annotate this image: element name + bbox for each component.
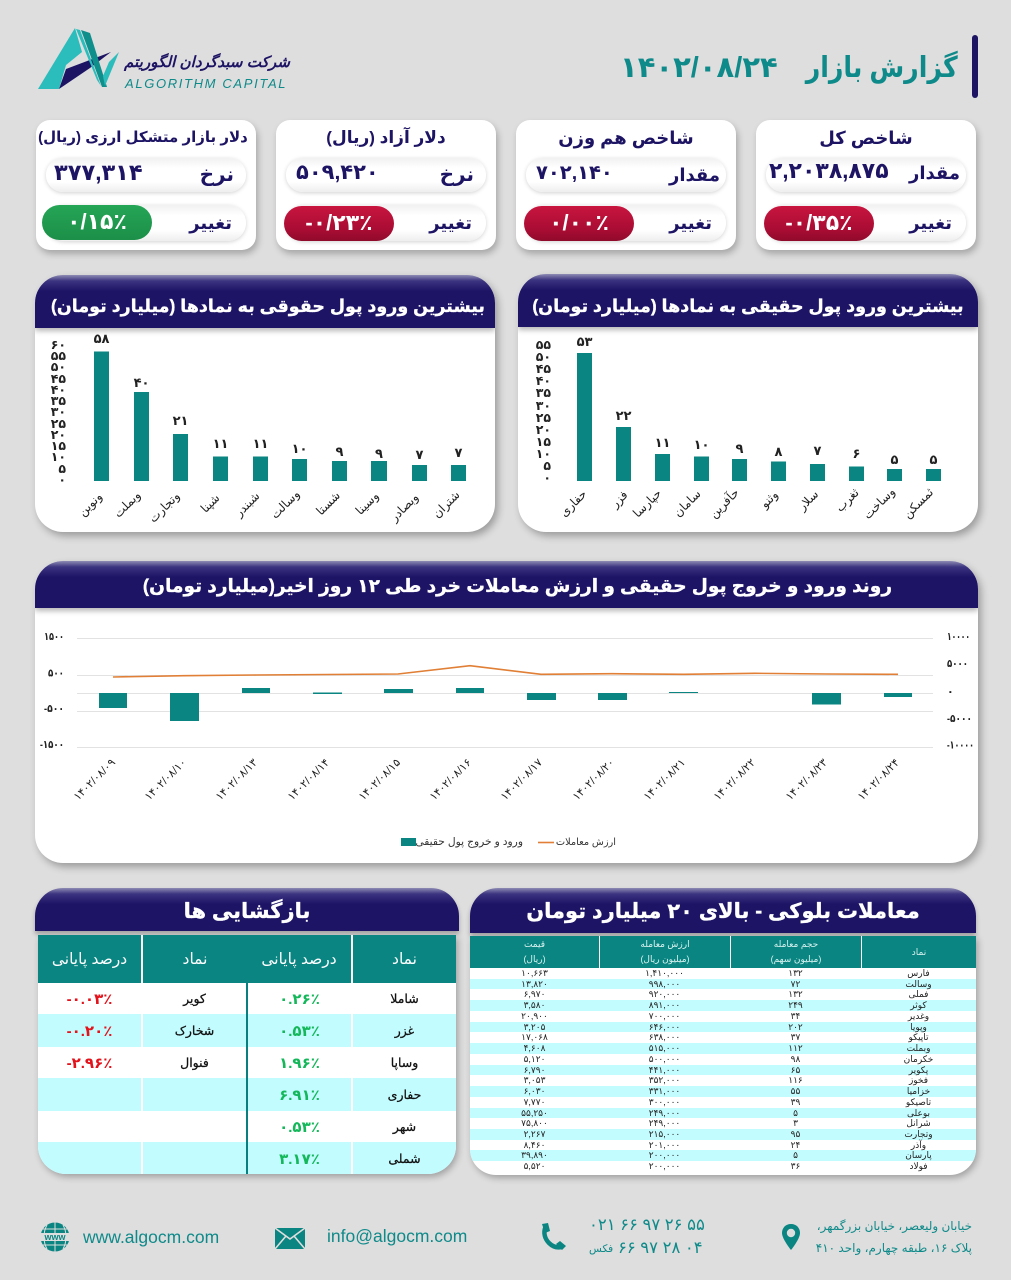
x axis labels: شپنا bbox=[198, 491, 223, 516]
bar values: ۴۰ bbox=[134, 375, 149, 390]
table: block trades: ۵ bbox=[793, 1150, 798, 1160]
bar values: ۱۱ bbox=[253, 436, 268, 451]
panel heading bbox=[35, 275, 495, 328]
table: block trades: کوثر bbox=[910, 1000, 927, 1010]
change value bbox=[284, 206, 394, 241]
bar values: ۱۰ bbox=[694, 437, 709, 452]
table header: (میلیون ریال) bbox=[640, 954, 690, 964]
table: block trades: ۳,۲۰۵ bbox=[524, 1022, 545, 1032]
table: block trades: ۳۵۲,۰۰۰ bbox=[649, 1075, 680, 1085]
value: ۷۰۲,۱۴۰ bbox=[536, 162, 613, 184]
panel: returns table bbox=[32, 888, 462, 1180]
bar values: ۷ bbox=[814, 443, 822, 458]
panel: block trades table bbox=[468, 888, 982, 1182]
x axis labels: وبصادر bbox=[386, 490, 422, 526]
bar values: ۵۸ bbox=[94, 331, 109, 346]
card title: شاخص کل bbox=[819, 128, 913, 148]
x axis labels: شبندر bbox=[231, 489, 263, 521]
table: block trades: ۷۲ bbox=[791, 979, 800, 989]
card: equal weight index bbox=[516, 120, 736, 250]
table: symbols and closing percent: -۰.۰۳٪ bbox=[67, 990, 112, 1008]
bar values: ۹ bbox=[736, 441, 744, 456]
table: block trades: ۲۰,۹۰۰ bbox=[521, 1011, 548, 1021]
table: block trades: ۳۴ bbox=[791, 1011, 800, 1021]
x axis labels: وسینا bbox=[353, 489, 382, 518]
table: block trades: پکویر bbox=[909, 1065, 928, 1075]
table: block trades: ۷۰۰,۰۰۰ bbox=[649, 1011, 680, 1021]
table: block trades: ۲,۲۶۷ bbox=[524, 1129, 545, 1139]
card title: دلار آزاد (ریال) bbox=[326, 128, 446, 147]
card title: دلار بازار متشکل ارزی (ریال) bbox=[38, 129, 248, 146]
x axis labels: ونوین bbox=[75, 489, 106, 520]
table: block trades: فخوز bbox=[909, 1075, 928, 1085]
y axis labels: ۰ bbox=[58, 473, 66, 487]
icon: logo mark bbox=[38, 28, 119, 89]
card: total index bbox=[756, 120, 976, 250]
x axis labels: وساخت bbox=[861, 485, 899, 523]
table: symbols and closing percent: شملی bbox=[388, 1152, 421, 1166]
panel: 12 day retail flow trend bbox=[35, 561, 978, 863]
y axis labels: ۴۰ bbox=[51, 383, 66, 397]
table: symbols and closing percent: ۱.۹۶٪ bbox=[279, 1054, 320, 1072]
table header: ارزش معامله bbox=[640, 939, 690, 949]
table header: (میلیون سهم) bbox=[771, 954, 821, 964]
label: change: تغییر bbox=[429, 213, 472, 233]
change pill bbox=[766, 205, 966, 241]
title: market report: گزارش بازار bbox=[806, 52, 958, 84]
change value: ۰/۱۵٪ bbox=[67, 209, 127, 234]
panel heading bbox=[470, 888, 976, 933]
email address: info@algocm.com bbox=[327, 1226, 467, 1246]
title: report date: ۱۴۰۲/۰۸/۲۴ bbox=[620, 52, 778, 84]
date axis labels: ۱۴۰۲/۰۸/۲۴ bbox=[856, 757, 902, 803]
legend bbox=[401, 836, 616, 848]
y axis labels: ۵۰ bbox=[536, 350, 551, 364]
table: block trades: ۲۰۲ bbox=[788, 1022, 803, 1032]
table: symbols and closing percent: درصد پایانی bbox=[52, 950, 127, 968]
bar values: ۱۰ bbox=[292, 441, 307, 456]
line: trade value bbox=[113, 666, 898, 677]
y axis labels: ۱۵ bbox=[51, 439, 66, 453]
table: symbols and closing percent: -۰.۲۰٪ bbox=[67, 1022, 112, 1040]
label: change: تغییر bbox=[669, 213, 712, 233]
panel heading: بیشترین ورود پول حقیقی به نمادها (میلیارد تومان) bbox=[532, 296, 964, 316]
table: block trades: ۴۴۱,۰۰۰ bbox=[649, 1065, 680, 1075]
table: block trades: ۱۳۲ bbox=[788, 989, 803, 999]
table: block trades: ۲۰۰,۰۰۰ bbox=[649, 1161, 680, 1171]
table: symbols and closing percent: کویر bbox=[183, 992, 206, 1006]
y axis labels: ۳۰ bbox=[536, 399, 551, 413]
table: block trades: بوعلی bbox=[907, 1108, 930, 1118]
change value: -۰/۲۳٪ bbox=[305, 210, 373, 235]
y axis labels: ۵۵ bbox=[51, 349, 66, 363]
table: block trades: ۶۴۶,۰۰۰ bbox=[649, 1022, 680, 1032]
table: block trades: ۳۶ bbox=[791, 1161, 800, 1171]
right axis labels: -۵۰۰۰ bbox=[947, 713, 972, 725]
table: block trades: ۳,۰۵۳ bbox=[524, 1075, 545, 1085]
address text: پلاک ۱۶، طبقه چهارم، واحد ۴۱۰ bbox=[816, 1241, 972, 1255]
table: block trades: ۳۹,۸۹۰ bbox=[521, 1150, 548, 1160]
table header bbox=[470, 936, 976, 968]
address text: خیابان ولیعصر، خیابان بزرگمهر، bbox=[817, 1219, 972, 1233]
y axis labels: ۵ bbox=[58, 462, 66, 476]
panel heading: بیشترین ورود پول حقوقی به نمادها (میلیارد تومان) bbox=[51, 296, 485, 316]
y axis labels: ۴۰ bbox=[536, 374, 551, 388]
table: block trades: ۱۱۶ bbox=[788, 1075, 803, 1085]
table: block trades: ۲۰۰,۰۰۰ bbox=[649, 1150, 680, 1160]
date axis labels: ۱۴۰۲/۰۸/۱۰ bbox=[143, 757, 189, 803]
table: block trades: ۹۸ bbox=[791, 1054, 800, 1064]
icon: envelope bbox=[275, 1228, 305, 1249]
bar values: ۵ bbox=[930, 452, 938, 467]
table: symbols and closing percent: نماد bbox=[183, 950, 207, 968]
date axis labels: ۱۴۰۲/۰۸/۱۵ bbox=[357, 757, 403, 803]
x axis labels: شتران bbox=[430, 488, 463, 521]
table: symbols and closing percent: حفاری bbox=[388, 1088, 421, 1102]
label: change: تغییر bbox=[189, 213, 232, 233]
x axis labels: سلار bbox=[794, 487, 822, 515]
y axis labels: ۱۰ bbox=[536, 447, 551, 461]
table: block trades: ۵,۱۲۰ bbox=[524, 1054, 545, 1064]
table header: قیمت bbox=[524, 939, 545, 949]
label: change: تغییر bbox=[909, 213, 952, 233]
label: amount: مقدار bbox=[669, 165, 720, 185]
table: symbols and closing percent: درصد پایانی bbox=[261, 950, 337, 968]
table: block trades: ۳۹ bbox=[791, 1097, 800, 1107]
table: block trades: ۹۲۰,۰۰۰ bbox=[649, 989, 680, 999]
table: block trades: خزامیا bbox=[907, 1086, 930, 1096]
website address: www.algocm.com bbox=[83, 1227, 219, 1247]
bar values bbox=[577, 334, 938, 467]
y axis labels: ۴۵ bbox=[51, 372, 66, 386]
bar values: ۲۲ bbox=[616, 408, 631, 423]
y axis labels: ۴۵ bbox=[536, 362, 551, 376]
y axis labels: ۳۵ bbox=[51, 394, 66, 408]
x axis labels: وسالت bbox=[268, 487, 303, 522]
table: symbols and closing percent: ۰.۵۳٪ bbox=[279, 1118, 320, 1136]
table: block trades: ۱۳,۸۲۰ bbox=[521, 979, 548, 989]
bar values: ۵ bbox=[891, 452, 899, 467]
table: block trades: تاپیکو bbox=[908, 1032, 929, 1042]
panel heading bbox=[518, 274, 978, 327]
x axis labels: وبملت bbox=[111, 488, 144, 521]
table: block trades: وآذر bbox=[911, 1140, 926, 1150]
table: symbols and closing percent: شاملا bbox=[390, 992, 419, 1006]
bar values: ۶ bbox=[853, 446, 860, 461]
legend: ورود و خروج پول حقیقی bbox=[415, 836, 523, 848]
table: block trades: ۶۵ bbox=[791, 1065, 800, 1075]
bar chart: real money bbox=[536, 334, 941, 523]
table: symbols and closing percent: فنوال bbox=[180, 1056, 209, 1070]
table: block trades: ۲۴ bbox=[791, 1140, 800, 1150]
title accent bar bbox=[972, 35, 978, 98]
label: amount: مقدار bbox=[909, 163, 960, 183]
fax label: فکس bbox=[589, 1243, 613, 1255]
table: block trades: ۲۴۹ bbox=[788, 1000, 803, 1010]
table: symbols and closing percent: ۶.۹۱٪ bbox=[279, 1086, 320, 1104]
phone numbers: ۰۲۱ ۶۶ ۹۷ ۲۶ ۵۵ bbox=[589, 1216, 705, 1234]
x axis labels bbox=[557, 485, 937, 523]
card title: شاخص هم وزن bbox=[558, 128, 694, 148]
table: block trades: ۵ bbox=[793, 1108, 798, 1118]
date axis labels: ۱۴۰۲/۰۸/۰۹ bbox=[72, 757, 118, 803]
table header: نماد bbox=[912, 946, 926, 956]
bar values bbox=[94, 331, 463, 462]
table: symbols and closing percent: ۰.۲۶٪ bbox=[279, 990, 320, 1008]
logo bbox=[38, 28, 290, 91]
x axis labels: وثنو bbox=[757, 488, 782, 512]
change value bbox=[524, 206, 634, 241]
legend: ارزش معاملات bbox=[556, 837, 616, 848]
bar values: ۱۱ bbox=[655, 435, 670, 450]
date axis labels: ۱۴۰۲/۰۸/۱۳ bbox=[214, 757, 260, 803]
table: block trades: ۵۵ bbox=[791, 1086, 800, 1096]
table: block trades: ۷۵,۸۰۰ bbox=[521, 1118, 548, 1128]
fax number: ۶۶ ۹۷ ۲۸ ۰۴ bbox=[618, 1239, 703, 1257]
x axis labels: سامان bbox=[671, 487, 704, 520]
y axis labels: ۳۵ bbox=[536, 386, 551, 400]
table: block trades: ۸,۴۶۰ bbox=[524, 1140, 545, 1150]
table header: (ریال) bbox=[523, 954, 546, 964]
company name in Persian: شرکت سبدگردان الگوریتم bbox=[124, 54, 290, 71]
date axis labels: ۱۴۰۲/۰۸/۲۳ bbox=[784, 757, 830, 803]
table: symbols and closing percent: ۳.۱۷٪ bbox=[279, 1150, 320, 1168]
change value bbox=[42, 205, 152, 240]
table: block trades: فولاد bbox=[909, 1161, 928, 1171]
company name in Latin: ALGORITHM CAPITAL bbox=[125, 76, 287, 91]
icon: phone bbox=[542, 1223, 566, 1250]
table: block trades: ۳۷ bbox=[791, 1032, 800, 1042]
value pill bbox=[766, 158, 966, 192]
table: block trades: فارس bbox=[907, 968, 930, 978]
value pill bbox=[526, 158, 726, 192]
icon: globe bbox=[41, 1222, 69, 1252]
table: block trades: ۹۵ bbox=[791, 1129, 800, 1139]
x axis labels: حپارسا bbox=[630, 486, 665, 521]
y axis labels: ۰ bbox=[543, 471, 551, 485]
x axis labels: فزر bbox=[607, 488, 631, 512]
y axis labels: ۲۵ bbox=[536, 411, 551, 425]
label: rate: نرخ bbox=[200, 164, 234, 186]
table: block trades: ۵۰۰,۰۰۰ bbox=[649, 1054, 680, 1064]
table: block trades: تاصیکو bbox=[906, 1097, 931, 1107]
table: block trades: ۶,۷۹۰ bbox=[524, 1065, 545, 1075]
combo chart: flows and trade value bbox=[40, 631, 974, 848]
table: block trades: فملی bbox=[908, 989, 928, 999]
table header: حجم معامله bbox=[774, 939, 818, 949]
table: symbols and closing percent: -۲.۹۶٪ bbox=[67, 1054, 112, 1072]
x axis labels: ثمسکن bbox=[900, 485, 937, 522]
change pill bbox=[286, 205, 486, 241]
table: block trades: ۱۰,۶۶۳ bbox=[521, 968, 548, 978]
bar chart: institutional money bbox=[50, 331, 466, 526]
bar values: ۹ bbox=[375, 446, 383, 461]
x axis labels: وتجارت bbox=[146, 489, 183, 526]
y axis labels bbox=[51, 338, 66, 487]
x axis labels: ثغرب bbox=[833, 486, 862, 515]
y axis labels: ۲۰ bbox=[51, 428, 66, 442]
table: block trades bbox=[470, 936, 976, 1175]
change value: -۰/۳۵٪ bbox=[785, 210, 853, 235]
left axis labels: ۱۵۰۰ bbox=[44, 631, 64, 643]
bar values: ۵۳ bbox=[577, 334, 592, 349]
table: block trades: ۶,۰۳۰ bbox=[524, 1086, 545, 1096]
table: block trades: وبملت bbox=[907, 1043, 930, 1053]
table: block trades: ۶۳۸,۰۰۰ bbox=[649, 1032, 680, 1042]
y axis labels: ۶۰ bbox=[51, 338, 66, 352]
change value bbox=[764, 206, 874, 241]
table: block trades: وسالت bbox=[905, 979, 932, 989]
date axis labels: ۱۴۰۲/۰۸/۱۷ bbox=[499, 757, 545, 803]
icon: location pin bbox=[782, 1224, 800, 1250]
table: block trades: وتجارت bbox=[904, 1129, 933, 1139]
date axis labels bbox=[72, 757, 902, 803]
table: block trades: ۵۱۵,۰۰۰ bbox=[649, 1043, 680, 1053]
change value: ۰/۰۰٪ bbox=[549, 210, 609, 235]
panel heading bbox=[35, 888, 459, 931]
left axis labels bbox=[40, 631, 64, 751]
table: block trades: ۱,۴۱۰,۰۰۰ bbox=[645, 968, 684, 978]
value: ۳۷۷,۳۱۴ bbox=[54, 160, 143, 185]
table: block trades: ۱۳۲ bbox=[788, 968, 803, 978]
table: block trades: ۱۷,۰۶۸ bbox=[521, 1032, 548, 1042]
card: free dollar bbox=[276, 120, 496, 250]
table: block trades: ۴,۶۰۸ bbox=[524, 1043, 545, 1053]
x axis labels bbox=[75, 487, 463, 526]
value pill bbox=[286, 158, 486, 192]
table: block trades: ۲۴۹,۰۰۰ bbox=[649, 1108, 680, 1118]
panel heading bbox=[35, 561, 978, 608]
date axis labels: ۱۴۰۲/۰۸/۲۱ bbox=[642, 757, 688, 803]
table: block trades: شرانل bbox=[906, 1118, 931, 1128]
table: block trades: ۹۹۸,۰۰۰ bbox=[649, 979, 680, 989]
table: block trades: ۲۴۹,۰۰۰ bbox=[649, 1118, 680, 1128]
value: ۵۰۹,۴۲۰ bbox=[296, 161, 379, 184]
left axis labels: ۵۰۰ bbox=[48, 668, 64, 680]
value pill bbox=[46, 158, 246, 192]
table: block trades: ۵,۵۲۰ bbox=[524, 1161, 545, 1171]
table: block trades: ۳ bbox=[793, 1118, 798, 1128]
panel: institutional money inflow bbox=[35, 275, 495, 532]
table: block trades: ۱۱۲ bbox=[788, 1043, 803, 1053]
table: block trades: ۳,۵۸۰ bbox=[524, 1000, 545, 1010]
table: block trades: ۲۱۵,۰۰۰ bbox=[649, 1129, 680, 1139]
panel heading: روند ورود و خروج پول حقیقی و ارزش معاملات خرد طی ۱۲ روز اخیر(میلیارد تومان) bbox=[143, 575, 892, 596]
y axis labels: ۲۵ bbox=[51, 417, 66, 431]
table: block trades: خکرمان bbox=[904, 1054, 933, 1064]
change pill bbox=[46, 205, 246, 241]
y axis labels: ۳۰ bbox=[51, 405, 66, 419]
right axis labels: ۵۰۰۰ bbox=[947, 658, 968, 670]
table: symbols and closing percent: وساپا bbox=[391, 1056, 418, 1070]
table: symbols and closing percent: ۰.۵۳٪ bbox=[279, 1022, 320, 1040]
panel heading: بازگشایی ها bbox=[184, 900, 310, 923]
bar values: ۷ bbox=[455, 445, 463, 460]
y axis labels: ۲۰ bbox=[536, 423, 551, 437]
change pill bbox=[526, 205, 726, 241]
bar values: ۸ bbox=[775, 444, 783, 459]
table: block trades: ۳۰۰,۰۰۰ bbox=[649, 1097, 680, 1107]
date axis labels: ۱۴۰۲/۰۸/۱۴ bbox=[286, 757, 332, 803]
value: ۲,۲۰۳۸,۸۷۵ bbox=[769, 158, 889, 183]
panel: real money inflow bbox=[518, 274, 978, 532]
right axis labels: ۰ bbox=[947, 686, 954, 698]
y axis labels: ۵۰ bbox=[51, 360, 66, 374]
table: symbols and closing percent: غزر bbox=[395, 1024, 414, 1038]
x axis labels: شستا bbox=[313, 488, 343, 518]
left axis labels: -۱۵۰۰ bbox=[40, 739, 64, 751]
left axis labels: -۵۰۰ bbox=[44, 703, 64, 715]
table: block trades: ۳۳۱,۰۰۰ bbox=[649, 1086, 680, 1096]
bar values: ۱۱ bbox=[213, 436, 228, 451]
y axis labels bbox=[536, 338, 551, 485]
label: rate: نرخ bbox=[440, 164, 474, 186]
table: block trades: پارسان bbox=[905, 1150, 932, 1160]
bar values: ۹ bbox=[336, 444, 344, 459]
date axis labels: ۱۴۰۲/۰۸/۲۲ bbox=[712, 757, 758, 803]
card: organized FX market dollar bbox=[36, 120, 256, 250]
table: block trades: ۵۵,۲۵۰ bbox=[521, 1108, 548, 1118]
date axis labels: ۱۴۰۲/۰۸/۲۰ bbox=[571, 757, 617, 803]
y axis labels: ۵۵ bbox=[536, 338, 551, 352]
table: block trades: ۸۹۱,۰۰۰ bbox=[649, 1000, 680, 1010]
x axis labels: حفاری bbox=[557, 487, 590, 520]
bar values: ۲۱ bbox=[173, 413, 188, 428]
y axis labels: ۱۵ bbox=[536, 435, 551, 449]
table: block trades: وپویا bbox=[910, 1022, 927, 1032]
panel heading: معاملات بلوکی - بالای ۲۰ میلیارد تومان bbox=[526, 900, 920, 923]
table: block trades: ۶,۹۷۰ bbox=[524, 989, 545, 999]
table: block trades: ۷,۷۷۰ bbox=[524, 1097, 545, 1107]
table: block trades: وغدیر bbox=[908, 1011, 929, 1021]
date axis labels: ۱۴۰۲/۰۸/۱۶ bbox=[428, 757, 474, 803]
address text bbox=[816, 1219, 972, 1255]
right axis labels bbox=[947, 631, 974, 752]
bars: real money flow bbox=[99, 688, 912, 721]
table: block trades: ۲۰۱,۰۰۰ bbox=[649, 1140, 680, 1150]
table: symbols and closing percent: شهر bbox=[393, 1120, 416, 1134]
table: symbols and closing percent bbox=[38, 935, 456, 1174]
bar values: ۷ bbox=[416, 447, 424, 462]
y axis labels: ۱۰ bbox=[51, 450, 66, 464]
y axis labels: ۵ bbox=[543, 459, 551, 473]
table: symbols and closing percent: شخارک bbox=[175, 1024, 214, 1038]
table: symbols and closing percent: نماد bbox=[392, 950, 417, 968]
x axis labels: حآفرین bbox=[706, 485, 743, 522]
icon: globe: www bbox=[43, 1232, 66, 1242]
footer: contact details bbox=[41, 1216, 972, 1257]
